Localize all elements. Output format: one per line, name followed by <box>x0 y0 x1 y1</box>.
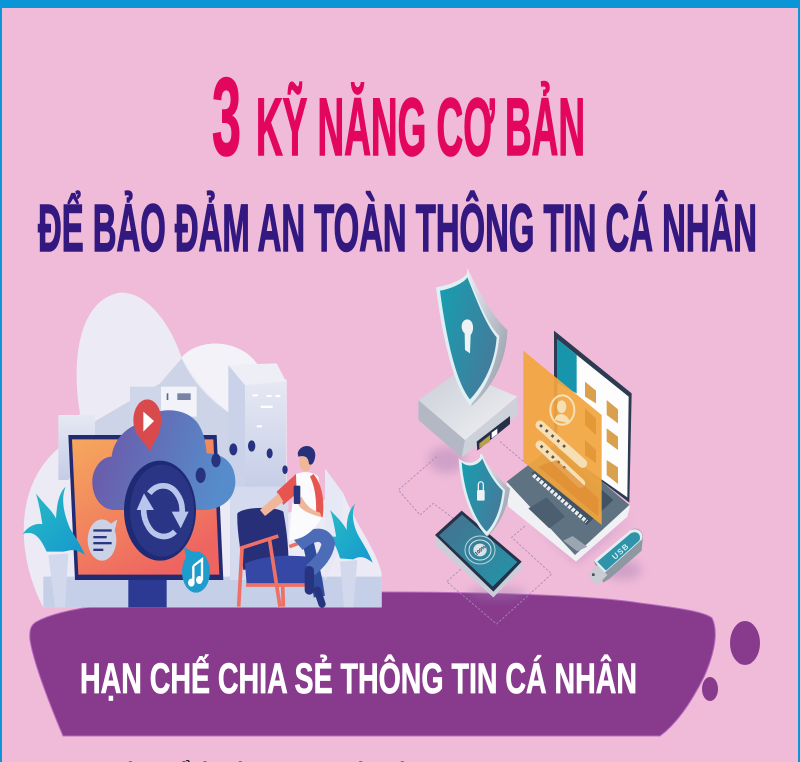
orange login panel <box>523 351 602 525</box>
chair <box>237 508 312 607</box>
title line 1 <box>212 56 585 179</box>
connection dots <box>196 440 288 483</box>
play pin <box>133 399 161 452</box>
background blobs <box>24 293 382 607</box>
plant left <box>23 487 85 607</box>
USB drive <box>588 529 643 586</box>
legs <box>298 535 328 604</box>
dashed connectors <box>398 442 552 624</box>
decorative circle large <box>730 621 760 665</box>
soft shadows <box>428 447 642 600</box>
server box <box>418 372 517 457</box>
title line 1: 3 <box>212 56 241 179</box>
padlock <box>477 482 485 501</box>
music pin <box>182 547 210 593</box>
arms <box>260 493 322 517</box>
laptop <box>507 331 632 562</box>
chat bubble <box>88 519 117 561</box>
monitor <box>68 435 223 607</box>
purple banner shape <box>30 592 715 736</box>
torso <box>289 472 322 541</box>
cloud <box>92 410 235 510</box>
head <box>298 446 315 471</box>
USB drive: USB <box>610 541 631 561</box>
buildings <box>58 363 343 580</box>
illustration: cloud city <box>23 293 382 607</box>
decorative circle small <box>702 677 718 701</box>
plant right <box>325 504 373 607</box>
small shield <box>459 453 510 537</box>
illustration: security devices <box>398 268 643 624</box>
phone <box>294 486 300 504</box>
phone: 100% <box>474 544 488 557</box>
keyhole <box>462 319 473 353</box>
large shield <box>436 268 507 406</box>
red jacket <box>277 474 323 517</box>
sync badge <box>124 461 196 561</box>
person on chair <box>237 446 328 607</box>
phone <box>435 511 522 597</box>
